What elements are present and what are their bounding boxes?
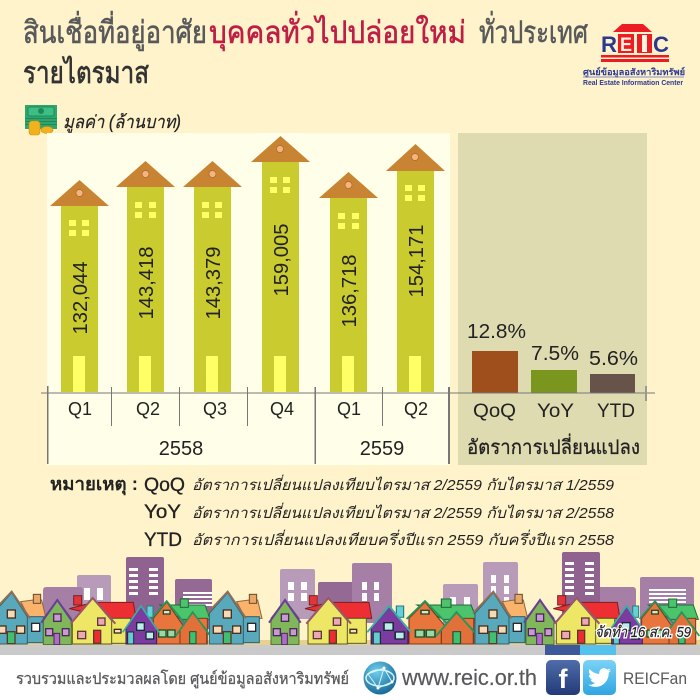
footer background <box>0 655 700 700</box>
bar: YoY: 7.5% <box>531 343 579 365</box>
logo: REIC <box>583 24 685 87</box>
year labels <box>159 438 404 460</box>
house bar: Q1 2559: 136,718 <box>339 254 361 328</box>
icon: twitter <box>583 660 616 695</box>
quarter labels: Q3 <box>203 399 227 419</box>
house bar: Q3 2558: 143,379 <box>203 246 225 320</box>
notes: YTD <box>144 530 182 551</box>
title: บุคคลทั่วไปปล่อยใหม่ <box>209 11 466 52</box>
logo: REIC: R <box>601 32 617 57</box>
notes <box>50 474 615 551</box>
icon: money and coins <box>25 105 57 135</box>
axis lines <box>41 386 655 464</box>
house bar: Q4 2558: 159,005 <box>271 224 293 296</box>
rate labels <box>473 401 635 422</box>
house bar: Q1 2558 <box>50 180 109 392</box>
house bar: Q3 2558 <box>183 161 242 392</box>
street <box>0 645 700 655</box>
logo: REIC: ศูนย์ข้อมูลอสังหาริมทรัพย์ <box>583 66 685 78</box>
logo: REIC: E <box>620 35 632 56</box>
quarter labels: Q2 <box>136 399 160 419</box>
house bar: Q1 2558: 132,044 <box>70 262 92 334</box>
social name: REICFan <box>623 669 687 688</box>
title <box>23 11 588 90</box>
icon: globe <box>364 662 396 694</box>
house bar: Q2 2558 <box>116 161 175 392</box>
notes: หมายเหตุ : <box>50 474 138 496</box>
skyline buildings <box>43 552 694 629</box>
footer credit: รวบรวมและประมวลผลโดย ศูนย์ข้อมูลอสังหาริมทรัพย์ <box>16 669 349 689</box>
ground strip <box>0 640 700 645</box>
rate labels: QoQ <box>473 401 516 422</box>
rate labels: YoY <box>537 401 574 422</box>
notes: อัตราการเปลี่ยนแปลงเทียบไตรมาส 2/2559 กับไตรมาส 2/2558 <box>192 502 615 522</box>
quarter labels: Q4 <box>270 399 294 419</box>
icon: facebook <box>546 660 580 695</box>
logo: REIC: Real Estate Information Center <box>583 80 683 87</box>
unit label: มูลค่า (ล้านบาท) <box>63 112 181 133</box>
website: www.reic.or.th <box>401 665 537 690</box>
bar: YTD <box>589 348 638 393</box>
notes: อัตราการเปลี่ยนแปลงเทียบครึ่งปีแรก 2559 กับครึ่งปีแรก 2558 <box>192 529 615 549</box>
panel: change rates <box>458 133 647 465</box>
rates caption: อัตราการเปลี่ยนแปลง <box>467 433 640 459</box>
rate labels: YTD <box>597 401 635 422</box>
year labels: 2558 <box>159 438 203 460</box>
panel: quarterly value chart <box>47 133 450 465</box>
notes: YoY <box>144 502 181 523</box>
logo: REIC: C <box>653 32 669 57</box>
title: สินเชื่อที่อยู่อาศัย <box>23 11 207 51</box>
social colour stripes <box>545 645 616 655</box>
notes: อัตราการเปลี่ยนแปลงเทียบไตรมาส 2/2559 กับไตรมาส 1/2559 <box>192 474 615 494</box>
quarter labels: Q2 <box>404 399 428 419</box>
house bar: Q2 2559 <box>386 144 445 392</box>
notes: QoQ <box>144 475 185 496</box>
year labels: 2559 <box>360 438 404 460</box>
bar: YTD: 5.6% <box>589 348 638 370</box>
quarter labels: Q1 <box>337 399 361 419</box>
bar: YoY <box>531 343 579 393</box>
house bar: Q2 2559: 154,171 <box>406 224 428 298</box>
icon: facebook: f <box>558 664 568 694</box>
row of colourful houses <box>0 592 699 645</box>
house bar: Q2 2558: 143,418 <box>136 246 158 320</box>
quarter labels <box>68 399 428 419</box>
bar: QoQ <box>467 321 526 393</box>
bar: QoQ: 12.8% <box>467 321 526 343</box>
house bar: Q1 2559 <box>319 172 378 392</box>
title: ทั่วประเทศ <box>479 11 588 50</box>
quarter labels: Q1 <box>68 399 92 419</box>
title: รายไตรมาส <box>23 55 149 90</box>
house bar: Q4 2558 <box>251 136 310 392</box>
